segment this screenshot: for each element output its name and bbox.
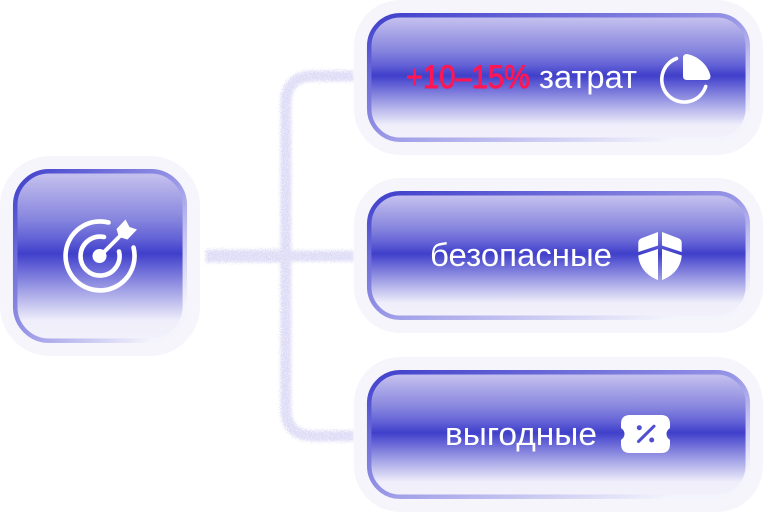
panel: profitable (354, 357, 763, 512)
text: costs: затрат (539, 59, 637, 95)
icon: shield (638, 232, 682, 280)
connector lines (206, 76, 354, 436)
panel: target (0, 156, 200, 356)
text: safe: безопасные (430, 237, 612, 273)
panel: safe (354, 178, 763, 333)
icon: pie chart (662, 54, 710, 102)
text: costs: +10–15% (406, 59, 530, 95)
text: profitable: выгодные (445, 416, 597, 452)
panel: costs (354, 0, 763, 155)
text: costs (406, 59, 637, 95)
icon: discount ticket (621, 415, 670, 453)
icon: target with arrow (66, 220, 137, 290)
